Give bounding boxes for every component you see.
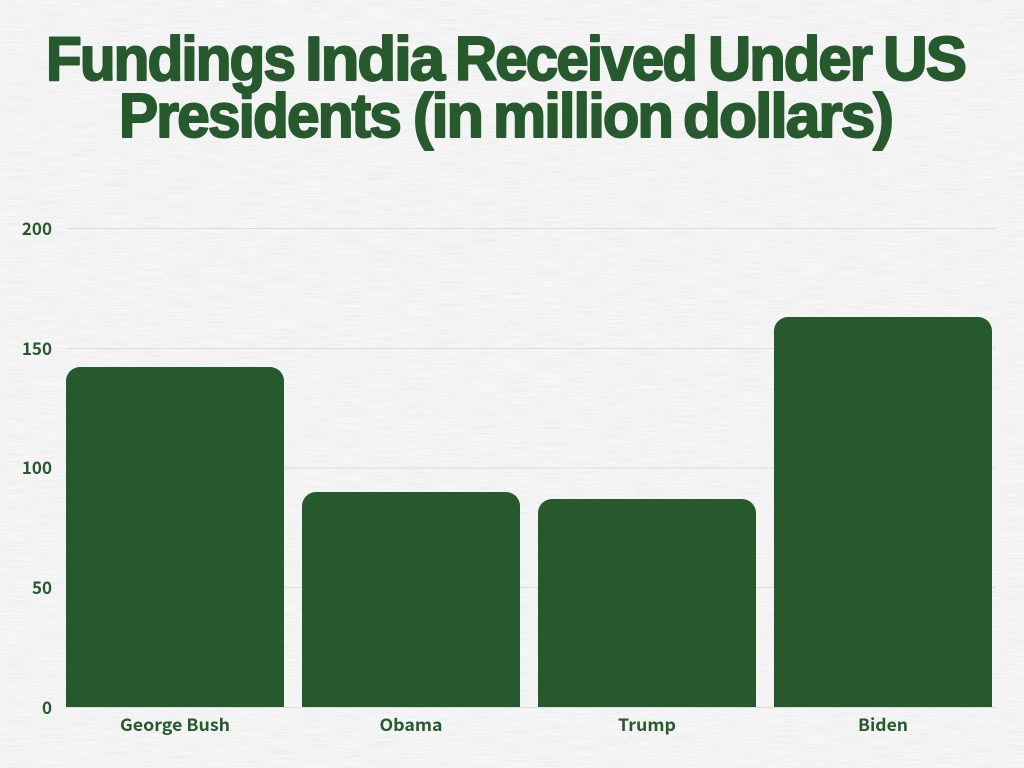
x axis labels: George Bush [120,711,230,736]
title: Received [455,25,696,94]
y axis labels: 0 [42,694,52,719]
bar: Biden [774,317,992,707]
title: Under [708,25,873,94]
x axis labels: Biden [858,711,908,736]
bars [66,317,992,707]
title: US [883,25,965,94]
y axis labels [22,215,52,719]
y axis labels: 50 [32,574,52,599]
y axis labels: 100 [22,454,52,479]
title: Presidents [119,82,400,151]
y axis labels: 150 [22,335,52,360]
bar: Trump [538,499,756,707]
bar chart [22,215,996,736]
x axis labels [120,711,908,736]
title: Fundings [46,25,294,94]
bar: Obama [302,492,520,707]
title [46,25,965,151]
x axis labels: Obama [380,711,442,736]
title: (in [413,82,482,151]
title: million [493,82,672,151]
title: dollars) [683,82,892,151]
bar: George Bush [66,367,284,707]
title: India [305,25,446,94]
y axis labels: 200 [22,215,52,240]
x axis labels: Trump [618,711,676,736]
